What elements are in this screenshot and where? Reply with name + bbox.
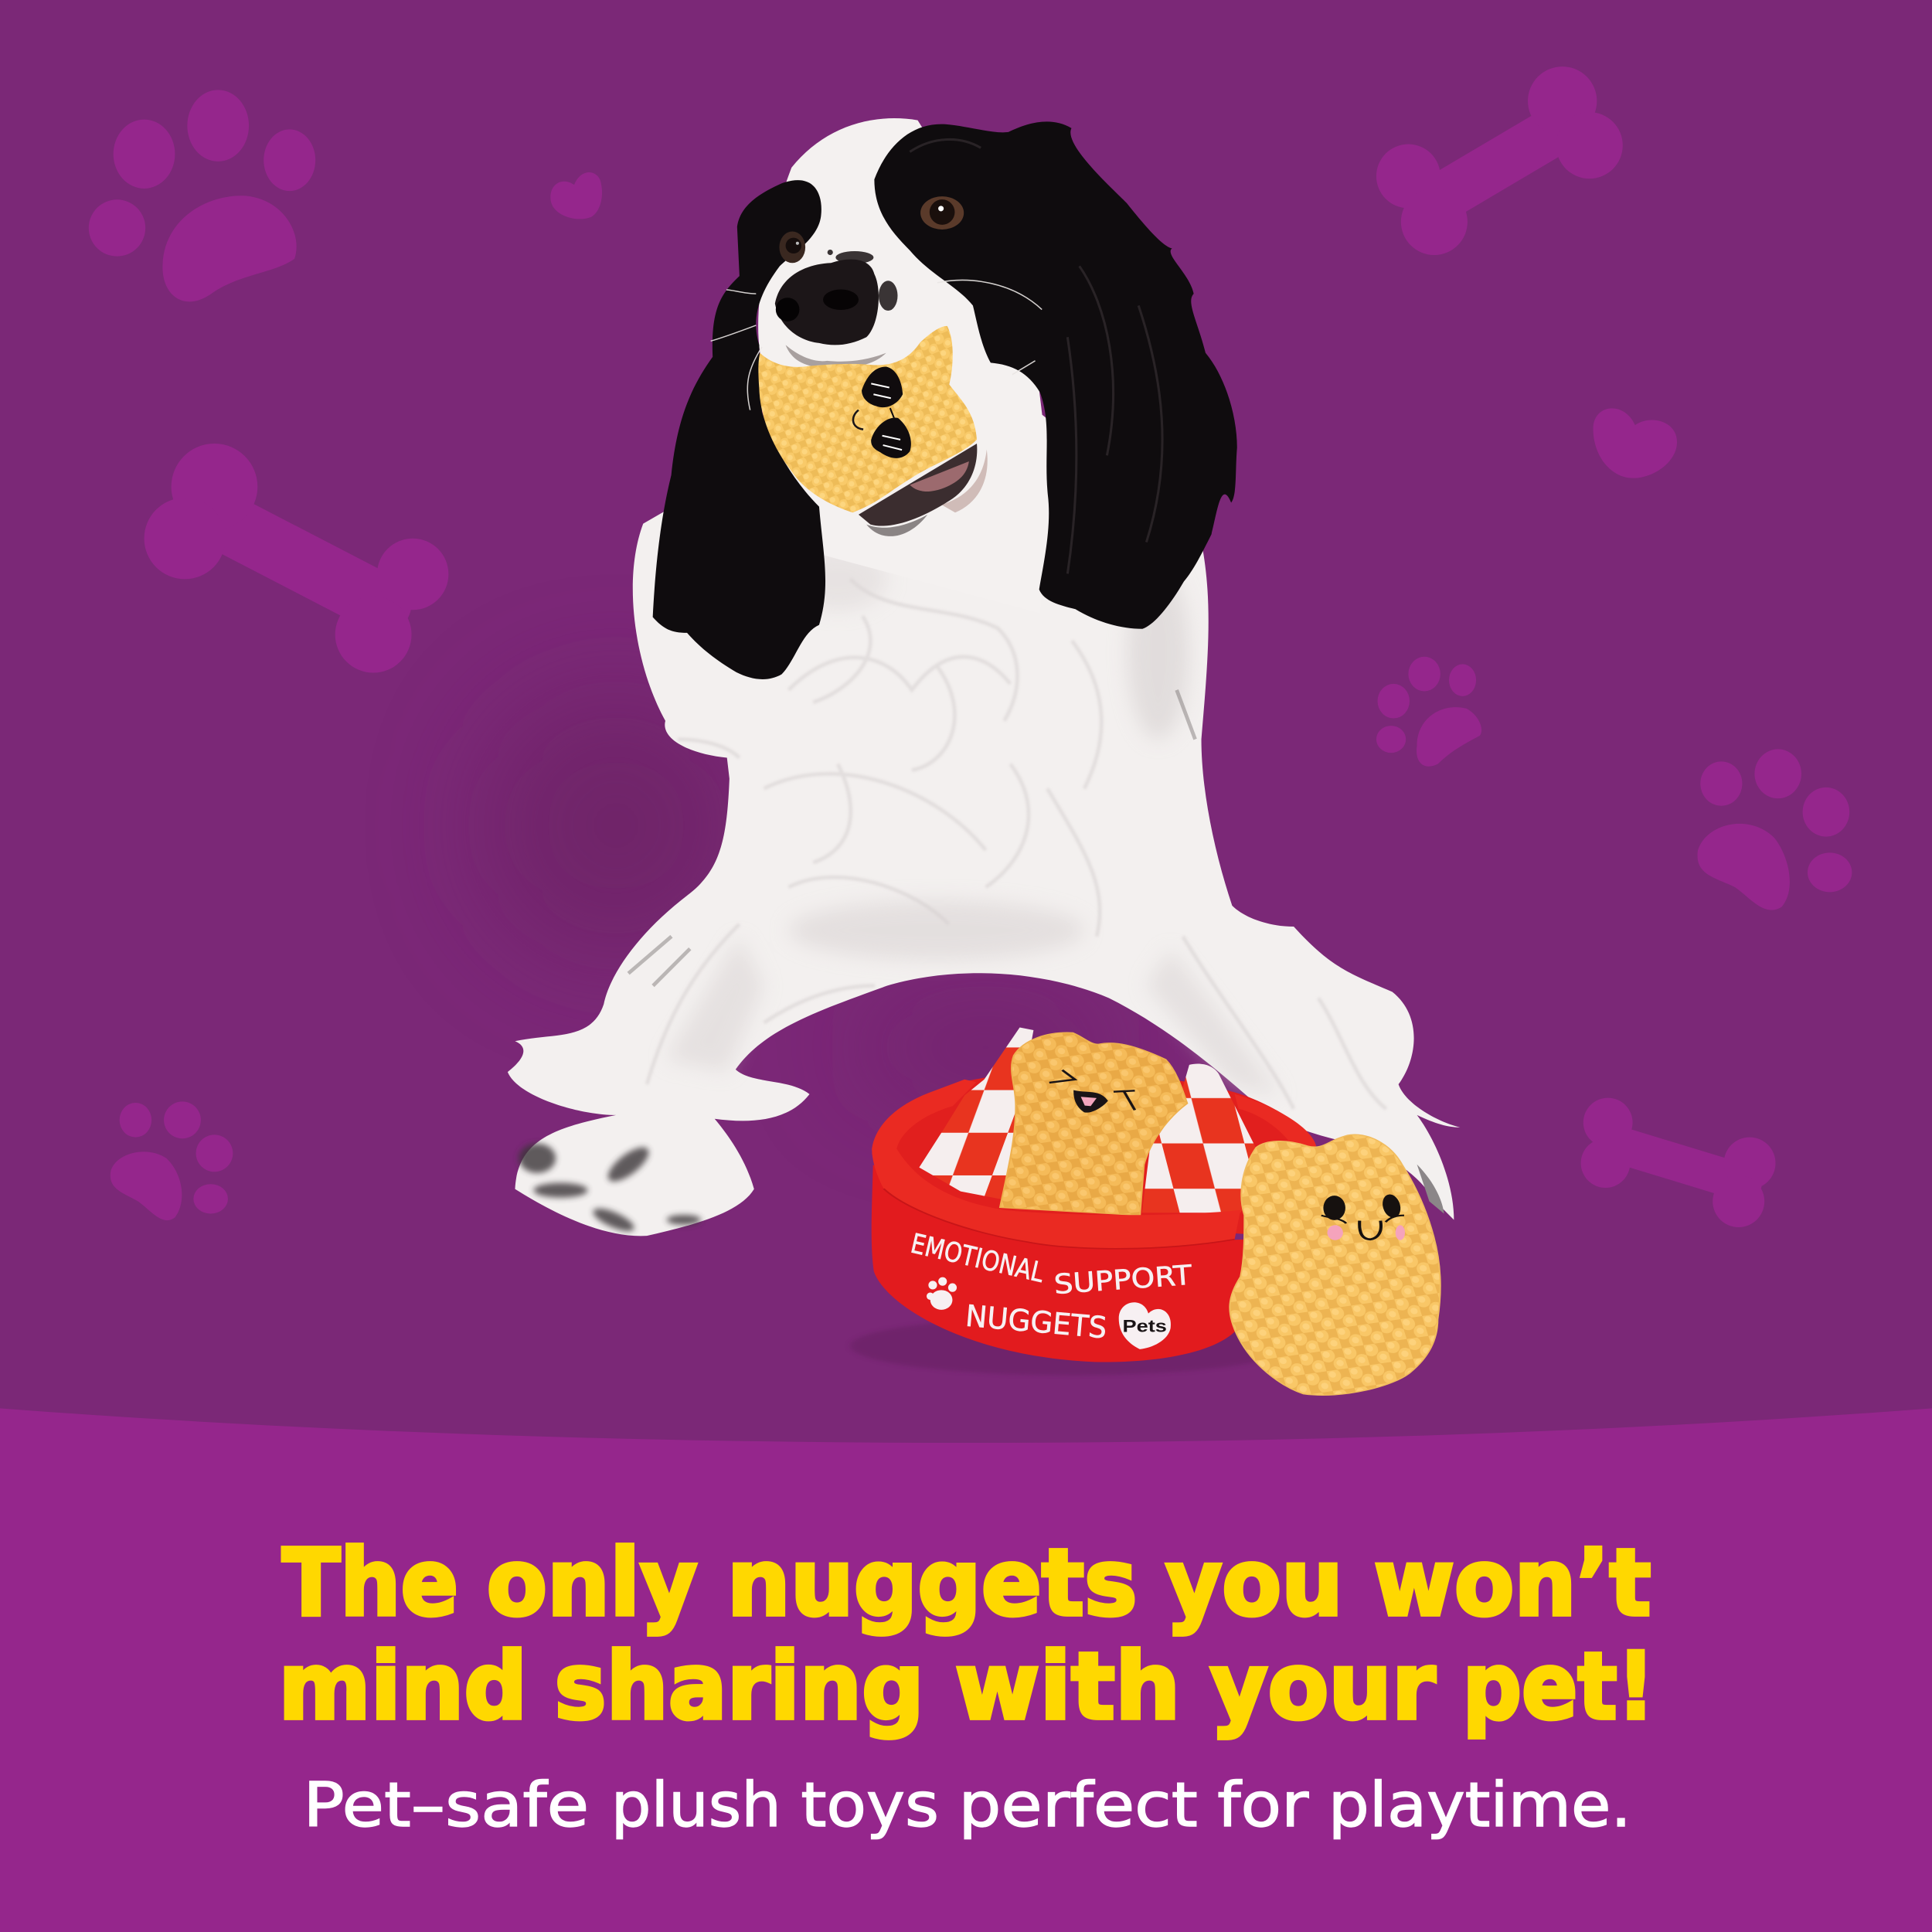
bottom banner	[0, 1408, 1932, 1932]
icon: bone top right	[1376, 66, 1623, 255]
subheadline: Pet–safe	[303, 1769, 589, 1841]
bowl text: emotional: EMOTIONAL	[908, 1228, 1047, 1289]
bowl outer wall	[872, 1165, 1247, 1362]
icon: bone bottom right	[1581, 1098, 1776, 1227]
left ear	[653, 180, 825, 679]
fur shading	[647, 579, 1386, 1109]
winking face	[1049, 1070, 1134, 1111]
left checkered napkin	[919, 1028, 1033, 1202]
bowl embroidered label	[908, 1228, 1193, 1349]
icon: heart right	[1594, 408, 1677, 478]
icon: bowl heart logo	[1119, 1302, 1171, 1349]
sunglasses	[862, 366, 911, 458]
front nugget	[1230, 1134, 1440, 1395]
bowl rim	[872, 1080, 1316, 1249]
headline line 2: sharing	[554, 1633, 924, 1740]
right ear and eye patch	[874, 121, 1237, 629]
chin and mouth	[941, 450, 988, 512]
icon: small heart top	[550, 172, 602, 219]
dog head	[653, 118, 1237, 679]
whiskers	[711, 281, 1042, 410]
right eye	[920, 196, 964, 230]
icon: paw bottom left	[111, 1101, 233, 1220]
muzzle spots	[828, 250, 897, 311]
product: bowl with nuggets	[850, 1028, 1440, 1395]
smile	[853, 410, 863, 430]
icon: bone left	[145, 444, 448, 673]
headline line 2: your	[1210, 1633, 1435, 1740]
headline line 2: pet!	[1463, 1633, 1655, 1740]
icon: bowl paw	[927, 1277, 957, 1310]
head white fur	[758, 118, 1052, 613]
headline line 2: mind	[278, 1633, 527, 1740]
front paw markings	[519, 1141, 701, 1236]
icon: bowl heart logo: Pets	[1122, 1317, 1167, 1336]
subheadline: perfect	[958, 1769, 1198, 1841]
icon: paw far right	[1698, 749, 1852, 910]
subheadline: playtime.	[1328, 1769, 1631, 1841]
floor shadow behind dog	[481, 690, 1121, 1097]
icon: small paw right	[1376, 657, 1481, 767]
bowl text: support: SUPPORT	[1053, 1260, 1193, 1301]
dog	[508, 118, 1460, 1236]
soft body shadows	[665, 549, 1281, 1097]
bowl interior	[872, 1072, 1315, 1234]
dog body	[508, 369, 1460, 1236]
icon: large paw top left	[89, 90, 315, 301]
large nugget in bowl	[1000, 1032, 1187, 1216]
headline line 1: only	[487, 1529, 697, 1637]
bowl text: nuggets: NUGGETS	[964, 1299, 1108, 1346]
subheadline: for	[1217, 1769, 1308, 1841]
ground shadow	[850, 1317, 1292, 1376]
left eye	[779, 231, 805, 263]
nose	[775, 260, 879, 345]
headline line 1: nuggets	[727, 1529, 1138, 1637]
headline line 1: you	[1165, 1529, 1343, 1637]
headline line 1: The	[282, 1529, 458, 1637]
headline line 1: won’t	[1374, 1529, 1651, 1637]
toy in dog mouth	[758, 326, 977, 512]
happy face	[1321, 1194, 1405, 1240]
headline	[278, 1529, 1655, 1740]
decorative paw prints, bones and hearts	[89, 66, 1852, 1227]
headline line 2: with	[955, 1633, 1180, 1740]
subheadline: plush	[611, 1769, 781, 1841]
subheadline: toys	[801, 1769, 939, 1841]
right checkered napkin	[1142, 1064, 1257, 1213]
body dark marks	[628, 690, 1196, 986]
